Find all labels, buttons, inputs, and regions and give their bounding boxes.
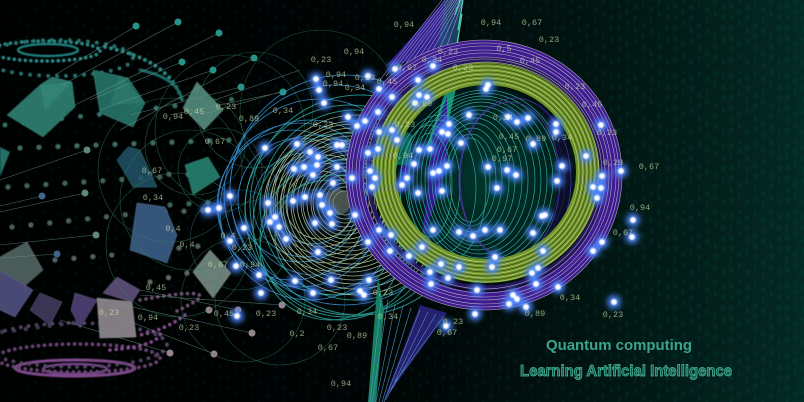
blue and pale concentric circles — [217, 75, 470, 320]
floating number labels: 0,23 — [99, 308, 119, 318]
floating number labels: 0,34 — [560, 293, 580, 303]
floating number labels: 0,67 — [208, 260, 228, 270]
subheading: Learning Artificial Intelligence: Learning Artificial Intelligence — [520, 363, 732, 380]
floating number labels: 0,23 — [216, 102, 236, 112]
floating number labels: 0,4 — [165, 224, 181, 234]
floating number labels: 0,23 — [603, 310, 623, 320]
floating number labels: 0,5 — [496, 44, 512, 54]
interior of main ring — [388, 85, 572, 275]
floating number labels: 0,89 — [347, 331, 367, 341]
floating number labels: 0,89 — [525, 309, 545, 319]
main concentric ring — [346, 40, 622, 310]
floating number labels: 0,89 — [239, 114, 259, 124]
floating number labels: 0,45 — [146, 283, 166, 293]
floating number labels: 0,67 — [522, 18, 542, 28]
central wave spikes — [368, 0, 463, 402]
floating number labels: 0,23 — [256, 309, 276, 319]
heading: Quantum computing: Quantum computing — [546, 337, 692, 354]
floating number labels: 0,23 — [179, 323, 199, 333]
floating number labels: 0,34 — [297, 307, 317, 317]
floating number labels: 0,34 — [493, 113, 513, 123]
floating number labels — [99, 18, 659, 389]
floating number labels: 0,4 — [179, 240, 195, 250]
floating number labels: 0,45 — [499, 132, 519, 142]
floating number labels: 0,94 — [163, 112, 183, 122]
floating number labels: 0,89 — [526, 134, 546, 144]
floating number labels: 0,67 — [437, 328, 457, 338]
floating number labels: 0,23 — [453, 63, 473, 73]
floating number labels: 0,67 — [205, 137, 225, 147]
floating number labels: 0,23 — [597, 128, 617, 138]
floating number labels: 0,67 — [397, 63, 417, 73]
floating number labels: 0,67 — [613, 228, 633, 238]
floating number labels: 0,4 — [220, 231, 236, 241]
floating number labels: 0,34 — [552, 133, 572, 143]
floating number labels: 0,2 — [289, 329, 305, 339]
floating number labels: 0,94 — [394, 20, 414, 30]
floating number labels: 0,45 — [582, 100, 602, 110]
floating number labels: 0,23 — [539, 35, 559, 45]
polyhedra on the left — [0, 70, 231, 338]
floating number labels: 0,23 — [313, 120, 333, 130]
floating number labels: 0,23 — [395, 120, 415, 130]
floating number labels: 0,34 — [345, 83, 365, 93]
floating number labels: 0,23 — [565, 82, 585, 92]
floating number labels: 0,23 — [443, 317, 463, 327]
floating number labels: 0,29 — [603, 158, 623, 168]
floating number labels: 0,34 — [143, 193, 163, 203]
floating number labels: 0,97 — [492, 154, 512, 164]
dotted rings and rows on the left — [0, 40, 245, 376]
floating number labels: 0,45 — [214, 309, 234, 319]
floating number labels: 0,94 — [481, 18, 501, 28]
floating number labels: 0,67 — [142, 166, 162, 176]
floating number labels: 0,67 — [497, 145, 517, 155]
floating number labels: 0,23 — [232, 243, 252, 253]
floating number labels: 0,34 — [422, 55, 442, 65]
floating number labels: 0,23 — [311, 55, 331, 65]
floating number labels: 0,23 — [355, 73, 375, 83]
floating number labels: 0,45 — [520, 56, 540, 66]
floating number labels: 0,94 — [240, 260, 260, 270]
floating number labels: 0,94 — [323, 79, 343, 89]
floating number labels: 0,67 — [639, 162, 659, 172]
floating number labels: 0,94 — [331, 379, 351, 389]
floating number labels: 0,94 — [344, 47, 364, 57]
floating number labels: 0,94 — [326, 70, 346, 80]
floating number labels: 0,34 — [273, 106, 293, 116]
floating number labels: 0,67 — [318, 343, 338, 353]
floating number labels: 0,89 — [412, 99, 432, 109]
floating number labels: 0,94 — [138, 313, 158, 323]
floating number labels: 0,94 — [393, 151, 413, 161]
floating number labels: 0,23 — [327, 323, 347, 333]
floating number labels: 0,23 — [438, 47, 458, 57]
connector lines ending in nodes — [0, 22, 300, 354]
thin green circles — [98, 30, 400, 365]
floating number labels: 0,23 — [373, 288, 393, 298]
floating number labels: 0,45 — [184, 107, 204, 117]
glowing nodes — [208, 66, 633, 326]
floating number labels: 0,94 — [630, 203, 650, 213]
floating number labels: 0,45 — [377, 77, 397, 87]
floating number labels: 0,34 — [378, 312, 398, 322]
